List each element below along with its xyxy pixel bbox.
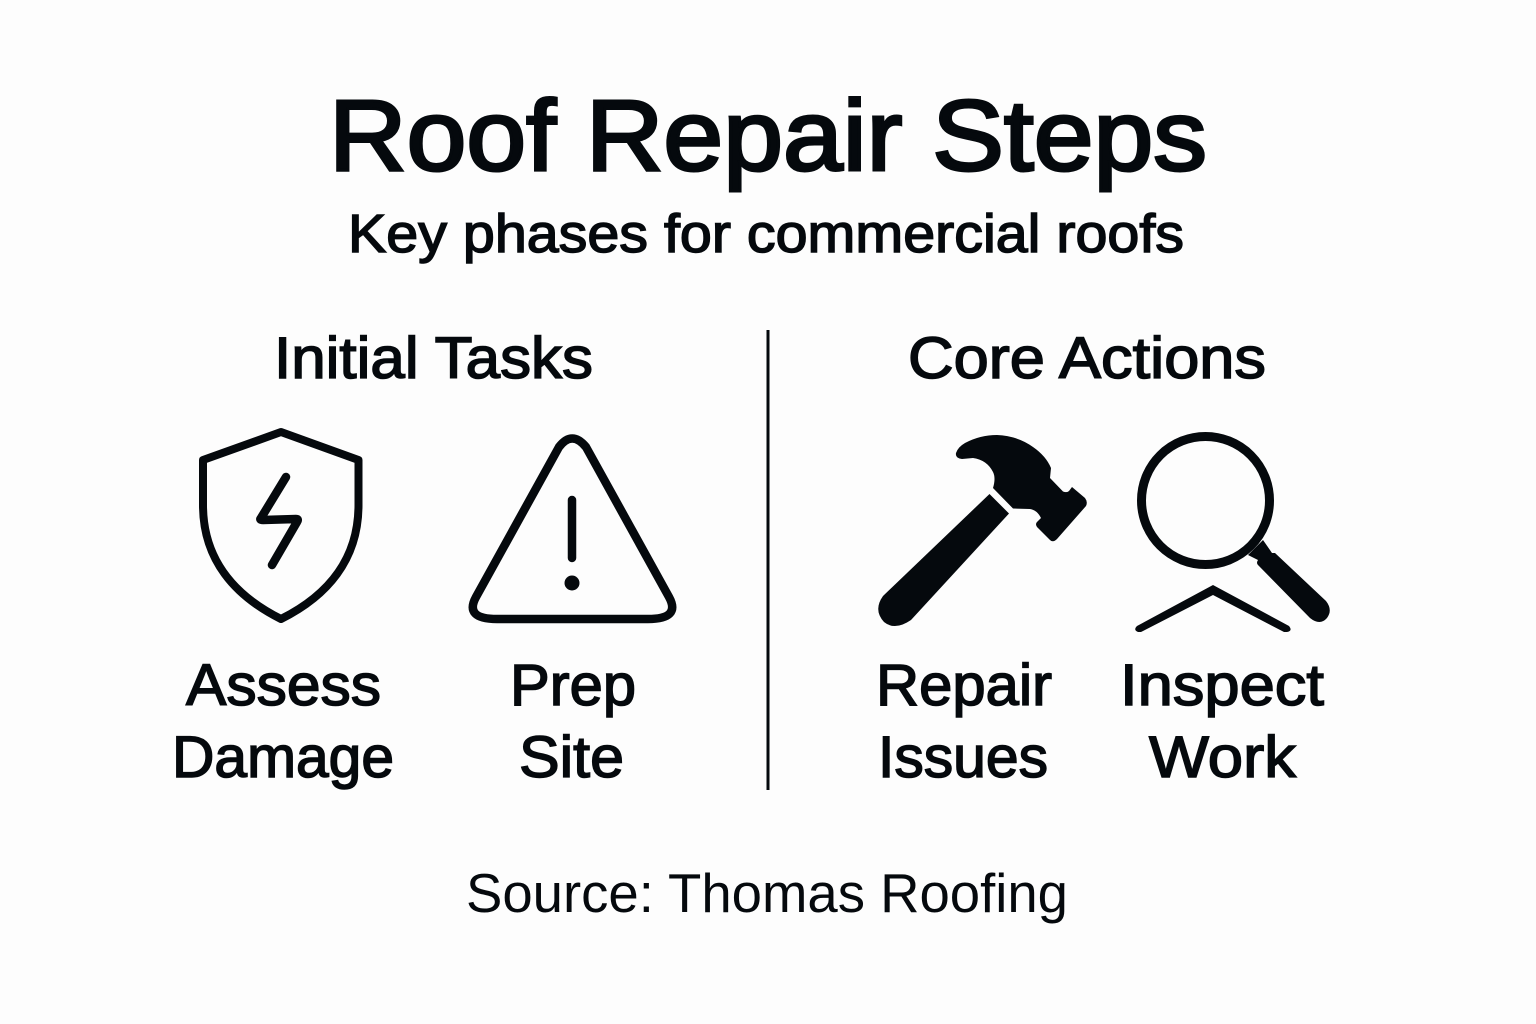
source note: Source: Thomas Roofing	[466, 862, 1068, 924]
label: prep site: Site	[519, 725, 624, 790]
panel: initial tasks	[172, 326, 672, 790]
icon: warning triangle	[473, 438, 672, 619]
label: repair issues: Issues	[878, 725, 1048, 790]
label: assess damage: Assess	[186, 653, 381, 718]
label: prep site: Prep	[510, 653, 636, 718]
heading: initial tasks: Initial Tasks	[274, 326, 593, 391]
label: repair issues	[876, 653, 1052, 790]
title: Roof Repair Steps	[329, 80, 1207, 192]
icon: hammer	[878, 435, 1087, 626]
icon: shield with lightning bolt	[203, 432, 358, 619]
panel: core actions	[876, 326, 1330, 790]
icon: magnifying glass over roof	[1135, 436, 1330, 632]
label: assess damage	[172, 653, 394, 790]
label: inspect work	[1120, 653, 1324, 790]
heading: core actions: Core Actions	[908, 326, 1266, 391]
label: prep site	[510, 653, 636, 790]
subtitle: Key phases for commercial roofs	[348, 204, 1184, 264]
label: assess damage: Damage	[172, 725, 394, 790]
label: inspect work: Work	[1149, 725, 1297, 790]
divider	[766, 330, 770, 790]
label: inspect work: Inspect	[1120, 653, 1324, 718]
label: repair issues: Repair	[876, 653, 1052, 718]
